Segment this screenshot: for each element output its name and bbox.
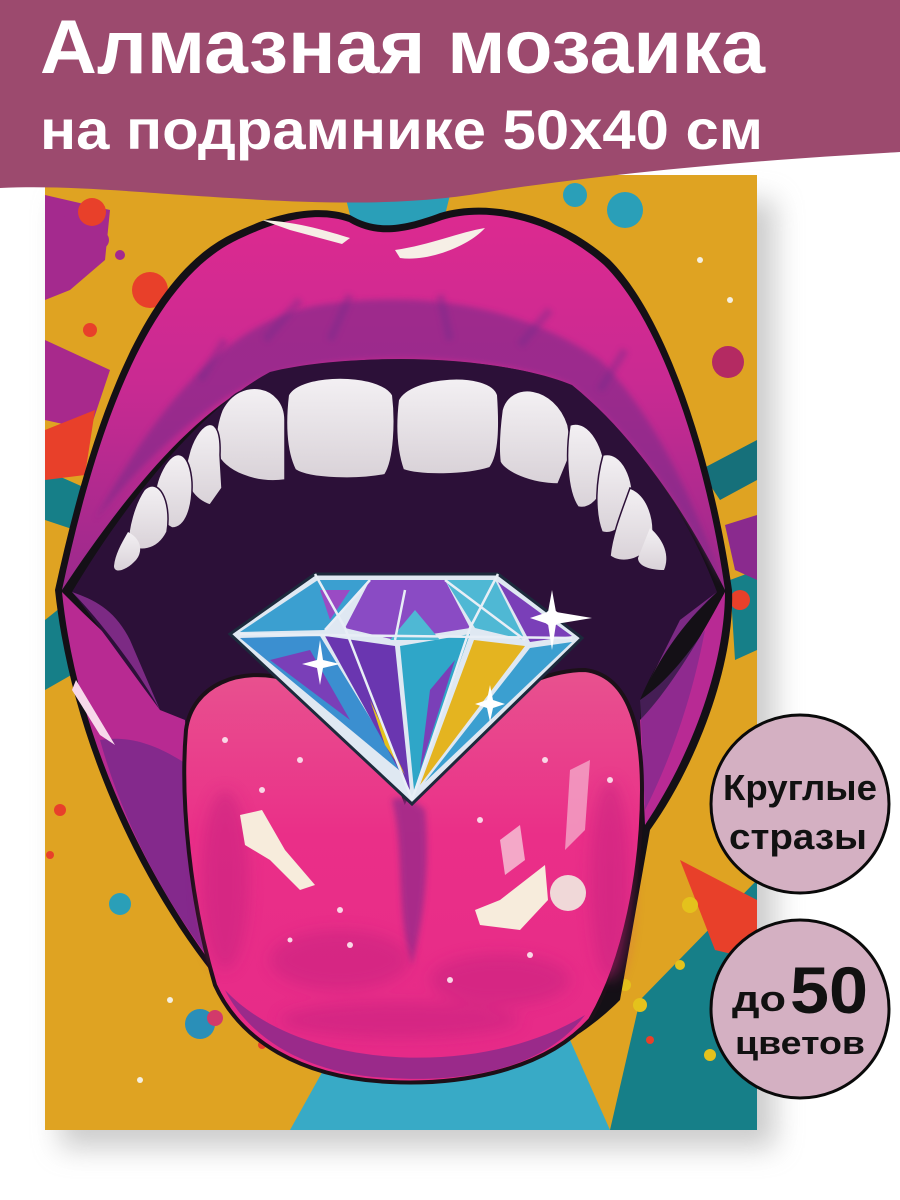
badge: up to 50 colours: до [732, 978, 786, 1019]
teal background rays [45, 195, 757, 1130]
subtitle: на подрамнике 50х40 см [40, 98, 763, 161]
painting canvas [45, 175, 757, 1130]
canvas shadow [60, 200, 775, 1148]
tongue speckles [222, 737, 613, 983]
diamond [230, 574, 592, 804]
lip shading [72, 220, 722, 975]
tongue lower shading [225, 990, 585, 1079]
badge: round rhinestones: стразы [729, 816, 867, 857]
tongue highlights [240, 810, 315, 890]
teeth [114, 378, 666, 571]
tongue mottling [201, 780, 630, 1038]
tongue centre crease [392, 798, 427, 965]
painting background [45, 175, 757, 1130]
badge: round rhinestones: Круглые [723, 767, 877, 808]
badge: up to 50 colours: цветов [735, 1025, 865, 1061]
title: Алмазная мозаика [40, 5, 766, 90]
header banner [0, 0, 900, 203]
lips outline and body [55, 208, 732, 1082]
badge: up to 50 colours: 50 [790, 953, 868, 1027]
badge: up to 50 colours [711, 920, 889, 1098]
mouth interior [72, 359, 717, 738]
tongue [184, 670, 642, 1082]
sparkles [530, 590, 592, 650]
badge: round rhinestones [711, 715, 889, 893]
paint splashes [45, 183, 757, 1083]
